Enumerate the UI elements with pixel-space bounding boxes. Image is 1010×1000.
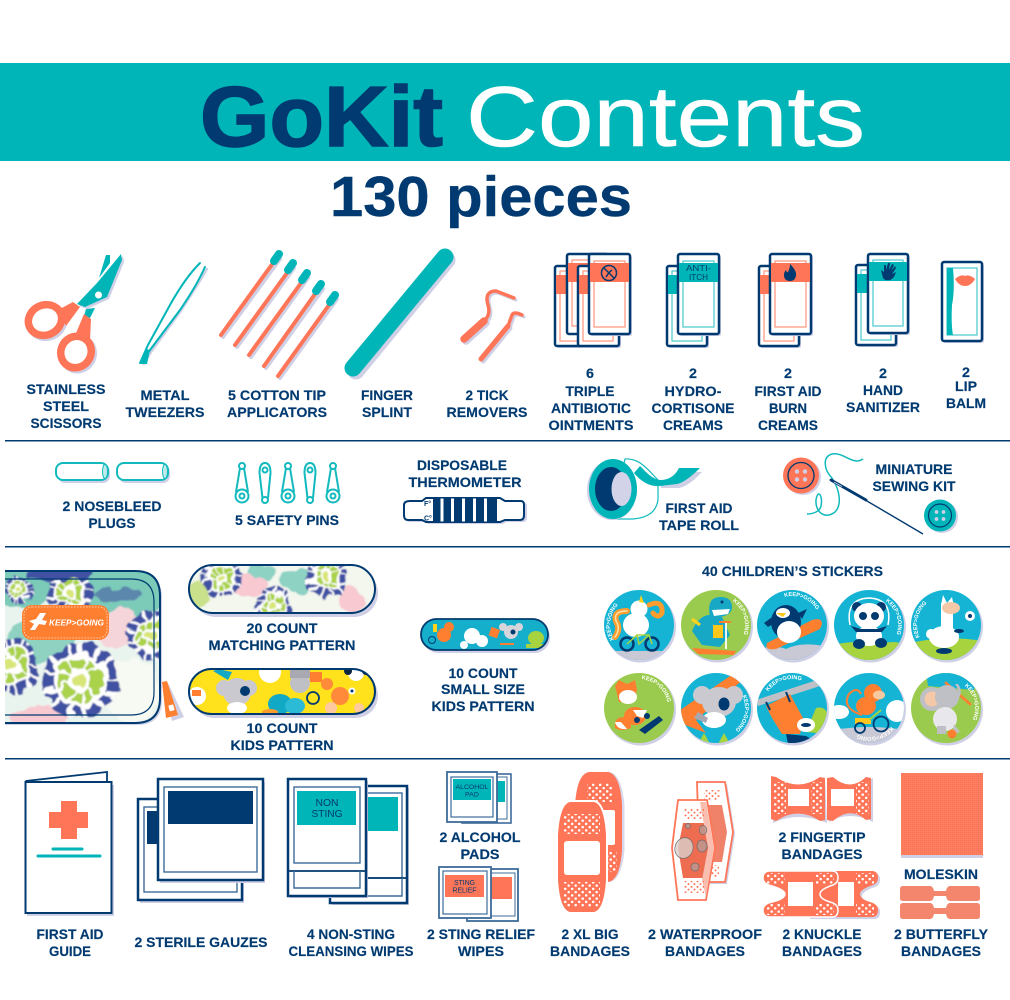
label [946, 364, 986, 411]
label [652, 365, 734, 433]
item: kids pattern bandages [188, 668, 378, 750]
icon: flame [784, 264, 796, 281]
label: 6 [586, 365, 594, 381]
icon: moleskin sheet [901, 773, 983, 858]
label [62, 498, 162, 531]
label [227, 387, 327, 420]
label: CREAMS [663, 417, 723, 433]
label: ANTIBIOTIC [551, 400, 631, 416]
label: 2 [879, 365, 887, 381]
item: tick removers [446, 291, 528, 420]
item: hydrocortisone creams [652, 254, 734, 433]
sticker: t-rex on scooter [681, 590, 753, 662]
item: sterile gauzes [134, 779, 268, 950]
label [846, 365, 920, 415]
label: 2 XL BIG [562, 926, 619, 942]
label: STEEL [43, 398, 89, 414]
icon: fingertip bandages [771, 776, 873, 823]
label [36, 926, 104, 959]
packet text: ALCOHOL [456, 784, 489, 791]
label: BANDAGES [665, 943, 745, 959]
label [782, 926, 862, 959]
packet text: RELIEF [452, 888, 476, 894]
icon: teal button [924, 500, 958, 533]
sticker: koala on branch [681, 673, 753, 746]
scale text F: F° [424, 500, 431, 508]
label: MATCHING PATTERN [208, 637, 356, 653]
sticker: llama soccer [911, 590, 983, 662]
label [408, 457, 522, 490]
sticker: unicorn on bike: KEEP>GOING [606, 603, 618, 641]
label: 20 COUNT [246, 620, 318, 636]
icon: sanitizer packets [856, 254, 910, 347]
dino [526, 631, 544, 648]
pouch logo tag [22, 605, 109, 640]
label: BALM [946, 395, 986, 411]
label: APPLICATORS [227, 404, 327, 420]
heading: children's stickers: 40 CHILDREN’S STICKERS [702, 563, 883, 579]
label: 2 [784, 365, 792, 381]
label [26, 381, 106, 431]
item: safety pins [235, 463, 340, 528]
packet text [686, 263, 711, 282]
icon: tick removers [464, 291, 524, 361]
icon: ointment packets [555, 254, 632, 348]
label: CREAMS [758, 417, 818, 433]
item: alcohol pads [440, 772, 521, 862]
label [230, 720, 334, 753]
label: FIRST AID [754, 383, 822, 399]
sticker: penguin snowboarding: KEEP>GOING [784, 592, 820, 610]
label: 2 STING RELIEF [427, 926, 535, 942]
water droplets [672, 824, 707, 871]
label: BANDAGES [550, 943, 630, 959]
scale text C: C° [424, 514, 432, 522]
label: 2 WATERPROOF [648, 926, 762, 942]
title banner [0, 63, 1010, 165]
icon: knuckle bandages [763, 871, 880, 919]
icon: cream packets [667, 254, 721, 348]
icon: safety pins [236, 463, 340, 503]
label: SMALL SIZE [441, 681, 525, 697]
label: 2 KNUCKLE [782, 926, 862, 942]
label: PADS [460, 846, 500, 862]
wheel [307, 692, 319, 704]
sticker: panda jump rope [834, 590, 906, 662]
item: lip balm [942, 262, 986, 411]
pouch fabric [5, 572, 159, 722]
label: METAL [140, 387, 190, 403]
item: nosebleed plugs [56, 463, 170, 531]
label: FINGER [361, 387, 413, 403]
label: MOLESKIN [904, 866, 978, 882]
sticker: penguin snowboarding [757, 590, 829, 662]
guide text lines [38, 849, 100, 856]
label: 2 NOSEBLEED [62, 498, 162, 514]
item: non-sting cleansing wipes [288, 779, 414, 959]
logo cross [29, 613, 47, 630]
label: THERMOMETER [408, 474, 522, 490]
item: miniature sewing kit [783, 454, 958, 534]
orange bits [489, 627, 514, 645]
label: KIDS PATTERN [230, 737, 334, 753]
label [754, 365, 822, 433]
label: PLUGS [88, 515, 136, 531]
label: MINIATURE [876, 461, 952, 477]
label: BURN [769, 400, 807, 416]
bandage: yellow kids pattern [188, 668, 378, 718]
packet text [312, 797, 342, 820]
label: TRIPLE [566, 383, 614, 399]
item: first aid guide [26, 772, 114, 959]
packet text [452, 880, 476, 894]
sticker: monkey on bike: KEEP>GOING [856, 726, 894, 741]
label [126, 387, 204, 420]
icon: gauze packets [138, 779, 265, 903]
sticker: koala on branch: KEEP>GOING [736, 694, 749, 732]
label [288, 926, 414, 959]
label [894, 926, 989, 959]
white llama [190, 670, 281, 705]
icon: tape roll [587, 459, 702, 520]
skate [213, 669, 232, 680]
title: GoKit: GoKit [200, 70, 443, 165]
label: 2 [689, 365, 697, 381]
sticker: elephant baseball [911, 673, 983, 746]
label: HYDRO- [664, 383, 722, 399]
label [872, 461, 956, 494]
llama [460, 628, 488, 649]
koala [499, 623, 523, 639]
label: 10 COUNT [448, 665, 518, 681]
label: CLEANSING WIPES [288, 943, 414, 959]
label: TWEEZERS [126, 404, 204, 420]
sticker: sloth on branch [757, 673, 829, 746]
label: CORTISONE [652, 400, 734, 416]
label [778, 829, 866, 862]
item: tie-dye pouch [5, 570, 184, 725]
icon: lip balm packet [942, 262, 984, 343]
label [659, 500, 739, 533]
label: 2 FINGERTIP [778, 829, 866, 845]
item: small size kids pattern [421, 619, 550, 714]
icon: wipe packets [288, 779, 409, 905]
label: GUIDE [49, 943, 91, 959]
sticker: fox skateboarding [604, 673, 676, 746]
item: cotton tip applicators [221, 254, 337, 420]
logo text: KEEP>GOING [49, 618, 104, 628]
item: disposable thermometer [404, 457, 527, 524]
label: HAND [863, 382, 903, 398]
zipper pull [162, 681, 184, 721]
item: stainless steel scissors [23, 254, 124, 431]
label: BANDAGES [782, 846, 862, 862]
sticker: unicorn on bike [604, 590, 676, 662]
label: 10 COUNT [246, 720, 318, 736]
label: 5 SAFETY PINS [235, 512, 339, 528]
label [432, 665, 534, 714]
icon: sting relief packets [439, 867, 518, 921]
item: first aid burn creams [754, 254, 822, 433]
icon: swabs [221, 254, 337, 378]
icon: thermometer strip [404, 498, 527, 524]
label: TAPE ROLL [659, 517, 739, 533]
item: triple antibiotic ointments [548, 254, 634, 433]
item: hand sanitizer [846, 254, 920, 415]
label: FIRST AID [36, 926, 104, 942]
item: finger splint [353, 257, 447, 420]
icon: guide booklet [26, 772, 114, 916]
sticker: fox skateboarding: KEEP>GOING [642, 675, 671, 702]
label: DISPOSABLE [417, 457, 507, 473]
label: 2 BUTTERFLY [894, 926, 989, 942]
label: FIRST AID [666, 500, 732, 516]
icon: lips [955, 275, 975, 286]
label: 2 TICK [466, 387, 508, 403]
bandage: small kids pattern [421, 619, 550, 653]
icon: tweezers [140, 263, 207, 364]
dino [262, 694, 305, 715]
label [548, 365, 634, 433]
label [648, 926, 762, 959]
sticker: monkey on bike [834, 673, 906, 746]
packet text: NON [316, 797, 338, 809]
packet text: STING [312, 808, 342, 820]
icon: orange button [783, 458, 821, 495]
label [208, 620, 356, 653]
sticker: panda jump rope: KEEP>GOING [886, 598, 902, 635]
item: sting relief wipes [427, 867, 535, 959]
label: SANITIZER [846, 399, 920, 415]
icon: butterfly strips [900, 886, 980, 919]
item: xl big bandages [550, 772, 630, 959]
icon: hand [881, 263, 896, 280]
icon: burn cream packets [759, 254, 813, 348]
sticker: llama soccer: KEEP>GOING [913, 601, 926, 638]
label: SCISSORS [30, 415, 102, 431]
monkey [321, 678, 364, 714]
bandage: tie-dye [188, 564, 378, 617]
wheel [428, 636, 436, 644]
icon: no-germ symbol [602, 266, 616, 280]
label: SPLINT [362, 404, 412, 420]
icon: waterproof bandages [672, 782, 735, 900]
label: REMOVERS [446, 404, 528, 420]
icon: red cross [49, 801, 88, 839]
label: BANDAGES [782, 943, 862, 959]
item: first aid tape roll [587, 459, 739, 533]
title: Contents: Contents [466, 70, 865, 165]
label: 2 [962, 364, 970, 380]
subtitle: piece count: 130 pieces [330, 165, 632, 229]
label: 2 ALCOHOL [440, 829, 521, 845]
label: OINTMENTS [548, 417, 634, 433]
label [440, 829, 521, 862]
item: metal tweezers [126, 263, 207, 420]
sticker: sloth on branch: KEEP>GOING [765, 675, 802, 692]
icon: xl bandages [557, 772, 624, 913]
icon: splint [353, 257, 447, 371]
label: SEWING KIT [872, 478, 956, 494]
panda [344, 670, 366, 681]
icon: scissors [23, 254, 124, 375]
label [427, 926, 535, 959]
packet text: STING [454, 880, 475, 887]
label: KIDS PATTERN [432, 698, 534, 714]
sticker: t-rex on scooter: KEEP>GOING [733, 598, 749, 635]
item: butterfly bandages [894, 886, 989, 959]
packet text [456, 784, 489, 798]
sticker: elephant baseball: KEEP>GOING [965, 683, 979, 720]
sticker group [604, 590, 983, 746]
label [550, 926, 630, 959]
koala [216, 678, 257, 714]
item: waterproof bandages [648, 782, 762, 959]
item: knuckle bandages [763, 871, 880, 959]
item: matching pattern bandages [188, 564, 378, 650]
label: WIPES [458, 943, 504, 959]
label: 5 COTTON TIP [228, 387, 326, 403]
elephant [290, 670, 310, 693]
packet text: PAD [465, 792, 479, 798]
label [361, 387, 413, 420]
label: BANDAGES [901, 943, 981, 959]
label [446, 387, 528, 420]
label: STAINLESS [26, 381, 106, 397]
icon: alcohol pad packets [447, 772, 511, 823]
orange bits [192, 672, 322, 696]
soccer ball [348, 688, 356, 694]
icon: plugs [56, 463, 170, 483]
packet text: ANTI- [686, 263, 711, 273]
label: 4 NON-STING [307, 926, 395, 942]
item: moleskin [901, 773, 983, 882]
label: 2 STERILE GAUZES [134, 934, 268, 950]
label: LIP [955, 378, 977, 394]
monkey [433, 622, 454, 642]
icon: thread and needle [807, 454, 923, 534]
item: fingertip bandages [771, 776, 873, 862]
packet text: ITCH [689, 272, 708, 282]
